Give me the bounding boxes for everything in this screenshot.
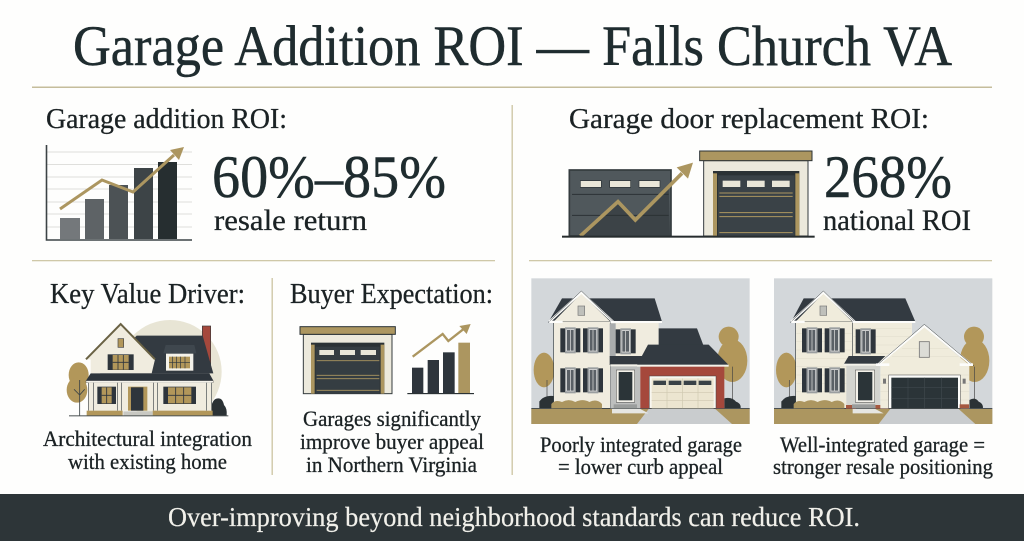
- heading: key value driver: Key Value Driver:: [50, 278, 245, 310]
- title: Garage Addition ROI — Falls Church VA: [73, 15, 952, 78]
- caption: poorly integrated garage: Poorly integrated garage: [540, 432, 742, 457]
- panel: buyer expectation: [290, 278, 493, 477]
- text: garages improve buyer appeal: improve buyer appeal: [300, 429, 484, 454]
- caption: well-integrated garage: [773, 432, 993, 479]
- footer banner: [0, 494, 1024, 541]
- text: architectural integration: Architectural integration: [43, 426, 252, 451]
- footer text: Over-improving beyond neighborhood standards can reduce ROI.: [168, 502, 860, 532]
- text: garages improve buyer appeal: in Northern Virginia: [306, 452, 477, 477]
- stat: 60%–85%: 60%–85%: [212, 144, 446, 210]
- panel: garage addition ROI: [46, 103, 446, 240]
- label: resale return: resale return: [214, 204, 367, 237]
- text: architectural integration: [43, 426, 252, 474]
- illustration: house with poorly integrated garage: [531, 278, 750, 424]
- label: national ROI: national ROI: [823, 204, 971, 237]
- panel: poorly integrated garage: [531, 278, 750, 479]
- text: architectural integration: with existing home: [68, 449, 227, 474]
- stat: 268%: 268%: [824, 144, 952, 210]
- caption: poorly integrated garage: [540, 432, 742, 479]
- icon: house: [67, 320, 230, 426]
- bar chart: rising resale value: [46, 145, 192, 240]
- text: garages improve buyer appeal: Garages significantly: [303, 406, 481, 431]
- heading: garage door replacement ROI: Garage door replacement ROI:: [569, 103, 929, 135]
- text: garages improve buyer appeal: [300, 406, 484, 477]
- panel: garage door replacement ROI: [562, 103, 971, 238]
- panel: well-integrated garage: [773, 278, 993, 479]
- caption: well-integrated garage: stronger resale positioning: [773, 454, 993, 479]
- illustration: house with well-integrated garage: [774, 278, 992, 424]
- heading: garage addition ROI: Garage addition ROI:: [46, 103, 287, 135]
- caption: well-integrated garage: Well-integrated garage =: [780, 432, 985, 457]
- icon: garage and rising chart: [300, 324, 474, 394]
- icon: old and new garage doors with arrow: [562, 151, 815, 238]
- caption: poorly integrated garage: = lower curb appeal: [558, 454, 723, 479]
- heading: buyer expectation: Buyer Expectation:: [290, 278, 493, 310]
- panel: key value driver: [43, 278, 252, 474]
